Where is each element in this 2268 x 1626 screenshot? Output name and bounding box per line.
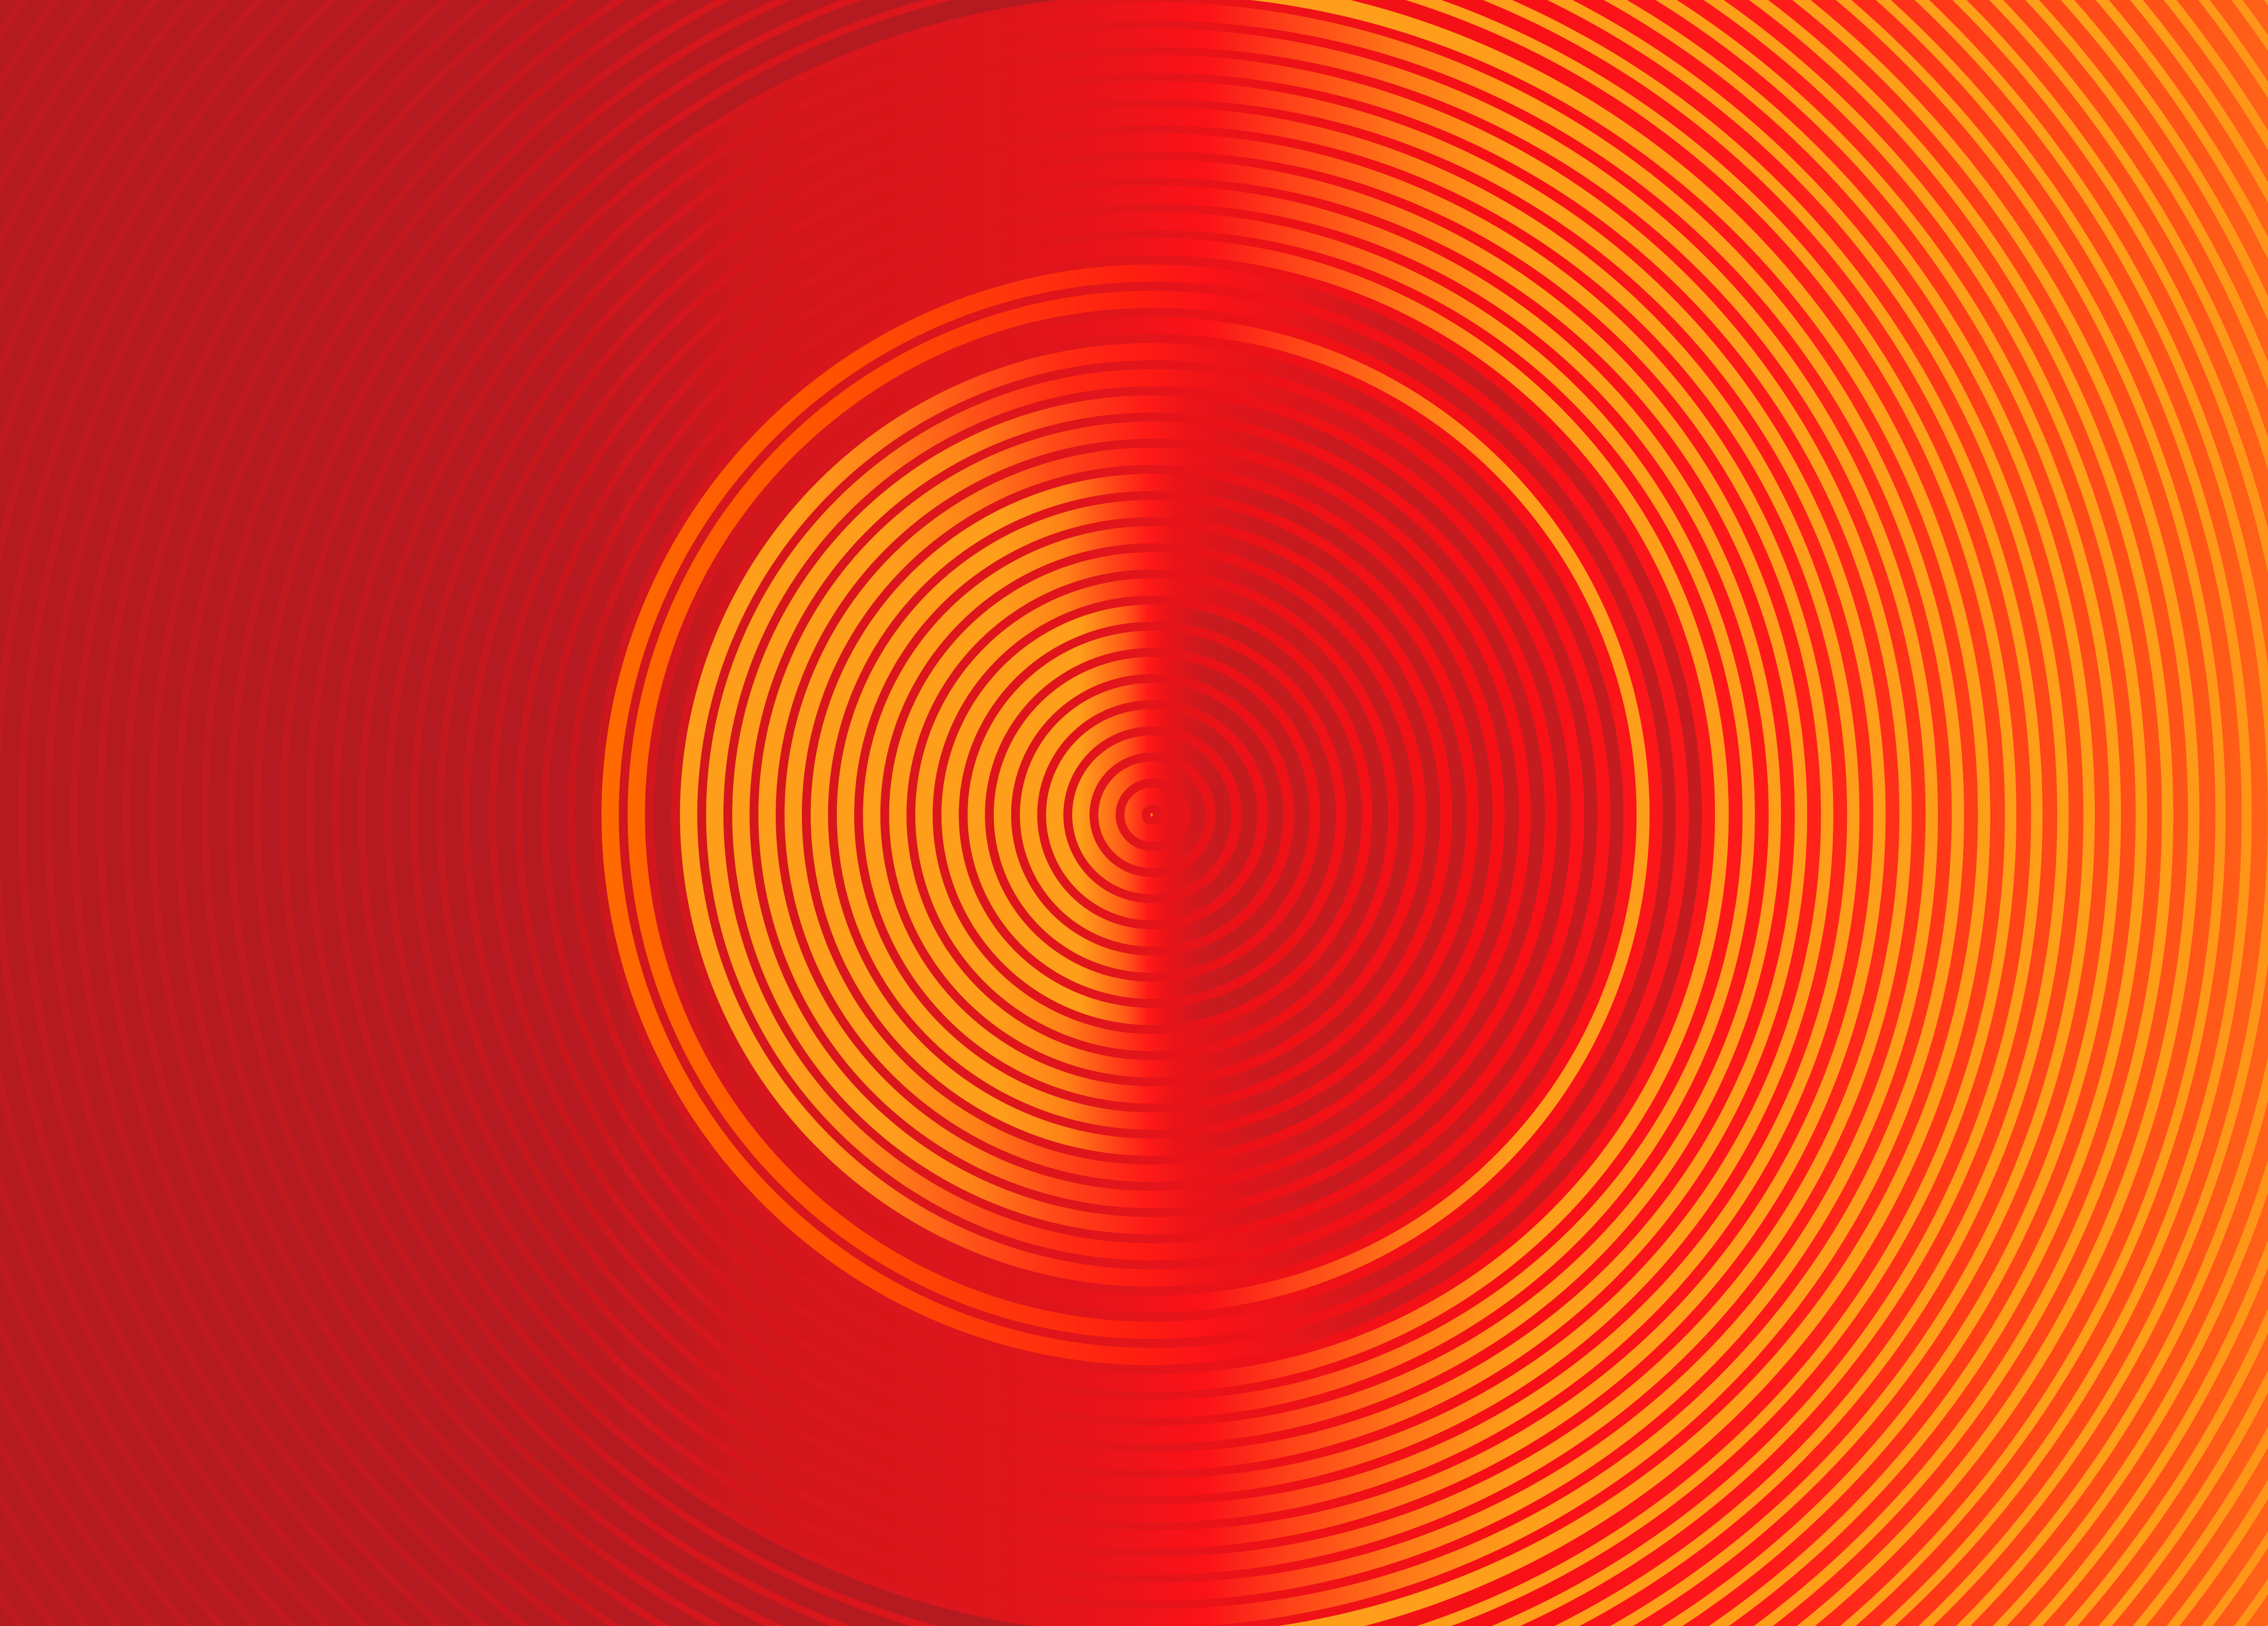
centre dot — [1151, 813, 1153, 817]
